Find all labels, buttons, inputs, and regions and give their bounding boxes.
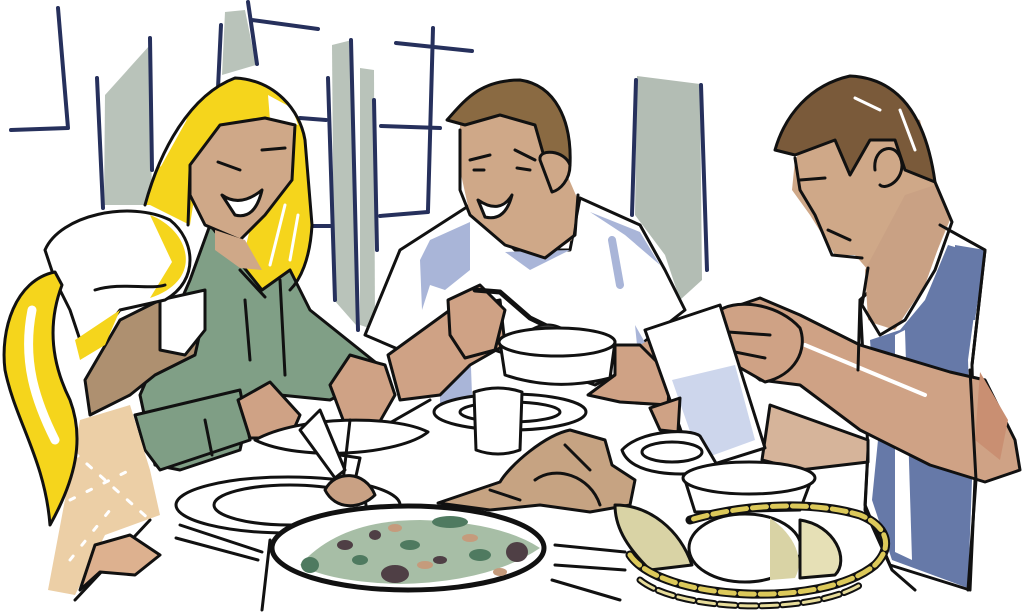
person: man in white shirt bbox=[365, 80, 685, 405]
hair back bbox=[145, 78, 312, 297]
arm and hand with spoon bbox=[388, 300, 505, 400]
salad bowl bbox=[272, 506, 544, 590]
skin bbox=[792, 90, 950, 330]
hand bbox=[80, 535, 160, 590]
roast chicken bbox=[438, 430, 635, 512]
right plate bbox=[622, 432, 720, 474]
window background bbox=[11, 2, 707, 330]
plate with fork and knife near woman bbox=[255, 410, 428, 506]
hands bbox=[330, 355, 395, 430]
face bbox=[190, 118, 295, 240]
face bbox=[460, 105, 578, 258]
pitcher bbox=[645, 305, 765, 470]
green top bbox=[140, 225, 385, 470]
face lines bbox=[795, 149, 985, 590]
hair bbox=[45, 211, 190, 355]
plate near child bbox=[176, 477, 400, 533]
person: woman in green bbox=[135, 78, 395, 470]
shirt bbox=[860, 225, 985, 590]
bread basket bbox=[615, 505, 886, 606]
arm bbox=[725, 298, 1020, 482]
serving bowl bbox=[499, 328, 615, 384]
table items lines bbox=[75, 400, 625, 610]
person: child with ponytail bbox=[4, 211, 205, 595]
hair bbox=[775, 76, 935, 182]
side bowl bbox=[683, 462, 815, 512]
person: man at right bbox=[720, 76, 1020, 590]
glass on plate bbox=[434, 388, 586, 454]
ponytail bbox=[4, 272, 77, 525]
